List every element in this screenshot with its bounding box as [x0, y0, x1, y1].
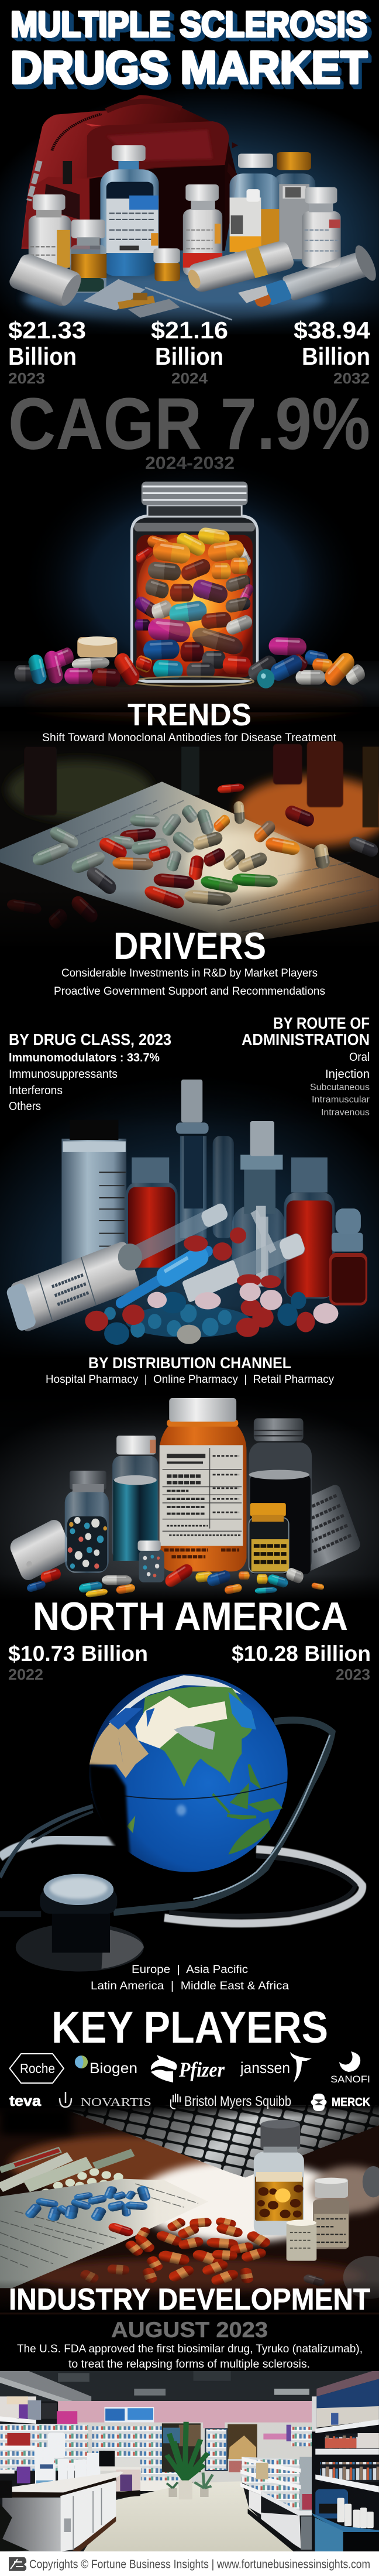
- stat: 2024 value: $21.16: [151, 317, 228, 344]
- icon: teal cylinder bottle: [112, 1436, 159, 1561]
- icon: red jar: [126, 1157, 178, 1268]
- logo: Roche: [9, 2054, 64, 2083]
- heading: drivers: DRIVERS: [113, 924, 266, 967]
- illustration: orange bottle with jars and pills: [0, 1392, 379, 1601]
- stat: 2024 value: Billion: [155, 342, 223, 370]
- logo: Roche: Roche: [20, 2061, 55, 2076]
- stat: 2023 value: $21.33: [8, 317, 86, 344]
- red and amber capsule pile: [78, 2217, 326, 2287]
- stat: 2032 value: Billion: [302, 342, 370, 370]
- drug class list: Interferons: [9, 1084, 63, 1097]
- icon: small amber pot: [153, 248, 180, 281]
- stat: 2023 value: [8, 317, 86, 387]
- drug class list: [9, 1051, 160, 1113]
- icon: right white bottle: [302, 187, 341, 268]
- stat: 2023 value: 2023: [8, 369, 45, 387]
- loose pills: [26, 1561, 325, 1598]
- route list: Injection: [325, 1068, 370, 1081]
- icon: dark glass jar: [249, 1418, 312, 1574]
- stat: north america 2023: [232, 1642, 371, 1683]
- globe: [89, 1674, 288, 1872]
- icon: lying label jar: [277, 1483, 362, 1575]
- illustration: glass jar of capsules: [0, 454, 379, 718]
- heading: by drug class: BY DRUG CLASS, 2023: [9, 1030, 171, 1049]
- stethoscope tube behind globe: [0, 1806, 363, 1923]
- title line 2: DRUGS MARKET: [11, 42, 367, 93]
- date: AUGUST 2023: [111, 2318, 268, 2342]
- icon: amber vial: [70, 220, 106, 293]
- icon: graduated beaker: [61, 1120, 126, 1268]
- route list: [310, 1051, 370, 1118]
- right shelves: [312, 2379, 379, 2551]
- stat: north america 2023: 2023: [336, 1666, 370, 1683]
- route list: Intramuscular: [312, 1095, 370, 1105]
- icon: small dark red jar: [329, 1208, 367, 1306]
- keyboard: [56, 2106, 379, 2177]
- floor: [84, 2481, 294, 2551]
- development text: to treat the relapsing forms of multiple sclerosis.: [68, 2358, 310, 2371]
- icon: dish at right: [343, 2166, 379, 2299]
- CAGR period: 2024-2032: [145, 453, 235, 473]
- capsules on table: [6, 783, 379, 931]
- stat: 2032 value: $38.94: [294, 317, 370, 344]
- logo: Janssen: [240, 2052, 312, 2082]
- heading: north america: NORTH AMERICA: [33, 1594, 348, 1639]
- icon: clear syringes: [114, 1197, 306, 1303]
- icon: lying bottle with yellow band: [184, 239, 296, 294]
- icon: left white bottle: [29, 194, 71, 270]
- logos: key players: [9, 2051, 370, 2111]
- logo: Sanofi: [330, 2051, 370, 2085]
- logo: Janssen: janssen: [240, 2059, 290, 2077]
- drivers list: Considerable Investments in R&D by Market Players: [61, 967, 318, 979]
- jar glass and lid: [132, 482, 257, 686]
- icon: red bag: [21, 95, 238, 251]
- capsules on document: [31, 801, 330, 911]
- icon: pill jar: [65, 1471, 109, 1573]
- icon: blister pack and tube: [84, 279, 268, 320]
- icon: white label cylinder: [287, 2219, 316, 2261]
- stat: north america 2022: 2022: [8, 1666, 43, 1683]
- icon: silver jar: [313, 2178, 349, 2249]
- icon: mini pill jar: [138, 1540, 164, 1582]
- heading: by route of administration: [242, 1014, 370, 1049]
- icon: large orange bottle: [160, 1398, 246, 1571]
- icon: blue glass bottle: [100, 145, 159, 276]
- illustration: capsules on a document: [0, 725, 379, 951]
- logo: Teva: teva: [9, 2093, 42, 2109]
- icon: tall red jar: [284, 1157, 335, 1299]
- loose capsules right: [246, 637, 367, 690]
- title: [11, 5, 367, 93]
- drivers list: Proactive Government Support and Recommendations: [54, 985, 325, 998]
- logo: Novartis: NOVARTIS: [81, 2096, 151, 2109]
- illustration: globe and stethoscope: [0, 1674, 363, 1971]
- icon: clear bottle with white cap: [230, 153, 279, 255]
- heading: by route of administration: ADMINISTRATION: [242, 1030, 370, 1049]
- loose pills and beads: [85, 1227, 338, 1345]
- drug class list: Others: [9, 1100, 41, 1113]
- icon: lying syringe: [247, 243, 379, 317]
- logo: Biogen: Biogen: [89, 2060, 137, 2077]
- stat: 2023 value: Billion: [8, 342, 77, 370]
- regions list: [91, 1963, 289, 1992]
- stat: north america 2022: [8, 1642, 148, 1683]
- stat: north america 2023: $10.28 Billion: [232, 1642, 371, 1666]
- distribution list: Hospital Pharmacy | Online Pharmacy | Retail Pharmacy: [46, 1373, 334, 1386]
- heading: key players: KEY PLAYERS: [51, 2003, 328, 2053]
- footer: [0, 2551, 379, 2576]
- stat: 2032 value: 2032: [333, 369, 370, 387]
- regions list: Latin America | Middle East & Africa: [91, 1979, 289, 1992]
- development text: [17, 2343, 363, 2371]
- icon: clear centre bottle: [232, 1121, 285, 1286]
- logo: Merck: [311, 2094, 370, 2111]
- plant: [167, 2422, 213, 2499]
- trends text: Shift Toward Monoclonal Antibodies for Disease Treatment: [42, 732, 337, 744]
- logo: Sanofi: SANOFI: [330, 2074, 370, 2085]
- icon: centre white bottle with red band: [183, 184, 222, 276]
- illustration: desk with capsules and jars: [0, 2106, 379, 2314]
- document sheet: [0, 782, 379, 943]
- logo: Pfizer: Pfizer: [178, 2058, 225, 2081]
- route list: Oral: [349, 1051, 370, 1064]
- stat: 2024 value: [151, 317, 228, 387]
- icon: glass bottle with yellow cap: [273, 152, 315, 261]
- ceiling: [0, 2371, 379, 2413]
- icon: lying white cylinder: [7, 252, 85, 309]
- icon: amber lidded jar: [249, 1503, 289, 1573]
- stethoscope front tube: [113, 1720, 332, 1912]
- regions list: Europe | Asia Pacific: [132, 1963, 248, 1976]
- route list: Intravenous: [321, 1108, 370, 1118]
- logo: Bristol Myers Squibb: Bristol Myers Squibb: [184, 2094, 291, 2109]
- hero illustration: red medical bag with bottles: [0, 88, 379, 337]
- loose capsules left: [15, 636, 153, 688]
- left shelves: [0, 2396, 88, 2474]
- logo: Biogen: [75, 2056, 137, 2077]
- icon: amber jar: [254, 2120, 304, 2235]
- stat: 2032 value: [294, 317, 370, 387]
- drivers list: [54, 967, 325, 998]
- icon: blue syringe: [112, 1239, 216, 1314]
- pens and white tablets: [0, 2150, 133, 2200]
- route list: Subcutaneous: [310, 1083, 370, 1092]
- back wall: [58, 2401, 312, 2491]
- drug class list: Immunomodulators : 33.7%: [9, 1051, 160, 1064]
- illustration: pharmacy interior: [0, 2371, 379, 2551]
- logo: Merck: MERCK: [332, 2096, 370, 2109]
- development text: The U.S. FDA approved the first biosimilar drug, Tyruko (natalizumab),: [17, 2343, 363, 2355]
- capsules inside jar: [133, 526, 255, 679]
- icon: Fortune Business Insights logo: [9, 2557, 26, 2571]
- stat: 2024 value: 2024: [171, 369, 208, 387]
- left counter: [0, 2433, 142, 2551]
- drug class list: Immunosuppressants: [9, 1068, 118, 1081]
- icon: tall syringe and vial: [176, 1080, 234, 1238]
- illustration: syringes, jars and pills: [0, 1042, 379, 1359]
- logo: Novartis: [60, 2092, 151, 2109]
- icon: white lying bottle: [8, 1517, 75, 1583]
- logo: Pfizer: [151, 2055, 225, 2082]
- document with blue capsules: [0, 2179, 208, 2288]
- right gondola: [240, 2457, 319, 2551]
- heading: trends: TRENDS: [128, 697, 251, 732]
- heading: by distribution channel: BY DISTRIBUTION CHANNEL: [88, 1354, 291, 1372]
- icon: lying white bottle: [5, 1240, 140, 1335]
- stethoscope chest piece: [0, 1874, 144, 1971]
- stat: north america 2022: $10.73 Billion: [8, 1642, 148, 1666]
